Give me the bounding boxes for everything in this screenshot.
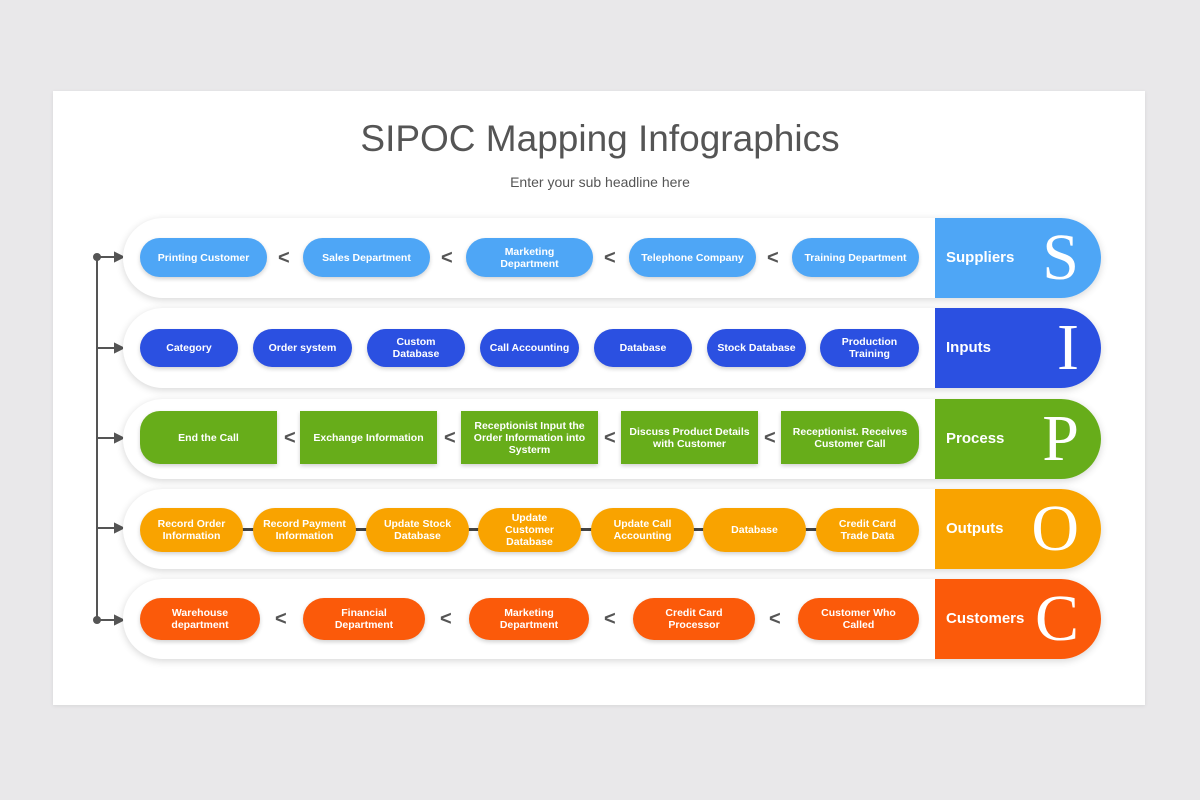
row: process: Order Information into: [474, 432, 585, 444]
tab: outputs: Outputs: [946, 520, 1004, 537]
row: suppliers: Sales Department: [322, 252, 411, 264]
tab: process: Process: [946, 430, 1004, 447]
row: process: <: [604, 427, 616, 449]
row: inputs: Production: [842, 336, 897, 348]
row: process: <: [284, 427, 296, 449]
row: outputs: Database: [506, 536, 553, 548]
row: customers: Department: [335, 619, 393, 631]
row: suppliers: Printing Customer: [158, 252, 249, 264]
row: suppliers: <: [604, 247, 616, 269]
tab: suppliers: S: [1042, 221, 1079, 294]
row: process: Receptionist. Receives: [793, 426, 907, 438]
row: inputs: Call Accounting: [490, 342, 569, 354]
tab: process: [935, 399, 1101, 479]
row: outputs: Update Call: [614, 518, 671, 530]
row: suppliers: Telephone Company: [641, 252, 744, 264]
tab: process: P: [1042, 402, 1079, 475]
row: process: Customer Call: [814, 438, 886, 450]
row: outputs: Update: [512, 512, 547, 524]
tab: suppliers: [935, 218, 1101, 298]
tab: customers: Customers: [946, 610, 1024, 627]
tab: customers: C: [1035, 582, 1079, 655]
row: customers: <: [769, 608, 781, 630]
row: process: Receptionist Input the: [474, 420, 585, 432]
tab: inputs: [935, 308, 1101, 388]
row: outputs: Accounting: [614, 530, 671, 542]
row: outputs: Trade Data: [841, 530, 894, 542]
row: inputs: Order system: [269, 342, 336, 354]
row: outputs: Update Stock: [384, 518, 451, 530]
row: inputs: Training: [849, 348, 890, 360]
row: process: End the Call: [178, 432, 239, 444]
row: customers: Processor: [668, 619, 720, 631]
row: inputs: Category: [166, 342, 212, 354]
row: customers: Marketing: [504, 607, 554, 619]
row: outputs: Information: [163, 530, 220, 542]
row: customers: <: [275, 608, 287, 630]
row: process: Systerm: [509, 444, 550, 456]
row: outputs: Record Payment: [263, 518, 346, 530]
row: inputs: Custom: [396, 336, 436, 348]
tab: suppliers: Suppliers: [946, 249, 1014, 266]
tab: outputs: O: [1031, 492, 1079, 565]
subtitle: Enter your sub headline here: [510, 174, 690, 190]
tab: inputs: Inputs: [946, 339, 991, 356]
row: customers: Warehouse: [172, 607, 228, 619]
row: suppliers: <: [278, 247, 290, 269]
row: outputs: Database: [394, 530, 441, 542]
row: outputs: Database: [731, 524, 778, 536]
row: inputs: Database: [620, 342, 666, 354]
row: inputs: Stock Database: [717, 342, 796, 354]
tab: customers: [935, 579, 1101, 659]
row: inputs: Database: [393, 348, 439, 360]
row: outputs: Credit Card: [839, 518, 896, 530]
row: customers: Financial: [341, 607, 387, 619]
row: customers: Customer Who: [821, 607, 896, 619]
row: process: with Customer: [653, 438, 726, 450]
row: customers: Credit Card: [665, 607, 723, 619]
row: suppliers: Training Department: [804, 252, 907, 264]
row: customers: department: [171, 619, 229, 631]
row: outputs: Record Order: [158, 518, 225, 530]
row: process: Exchange Information: [313, 432, 424, 444]
row: process: <: [444, 427, 456, 449]
tab: outputs: [935, 489, 1101, 569]
title: SIPOC Mapping Infographics: [360, 118, 840, 159]
row: suppliers: Department: [500, 258, 559, 270]
tab: inputs: I: [1057, 311, 1079, 384]
row: outputs: Information: [276, 530, 333, 542]
row: customers: Called: [843, 619, 874, 631]
row: process: Discuss Product Details: [629, 426, 750, 438]
row: customers: Department: [500, 619, 558, 631]
row: suppliers: <: [441, 247, 453, 269]
card: [53, 91, 1145, 705]
row: customers: <: [604, 608, 616, 630]
row: suppliers: <: [767, 247, 779, 269]
row: customers: <: [440, 608, 452, 630]
row: process: <: [764, 427, 776, 449]
row: suppliers: Marketing: [505, 246, 554, 258]
row: outputs: Customer: [505, 524, 554, 536]
bracket connector: [93, 251, 124, 626]
